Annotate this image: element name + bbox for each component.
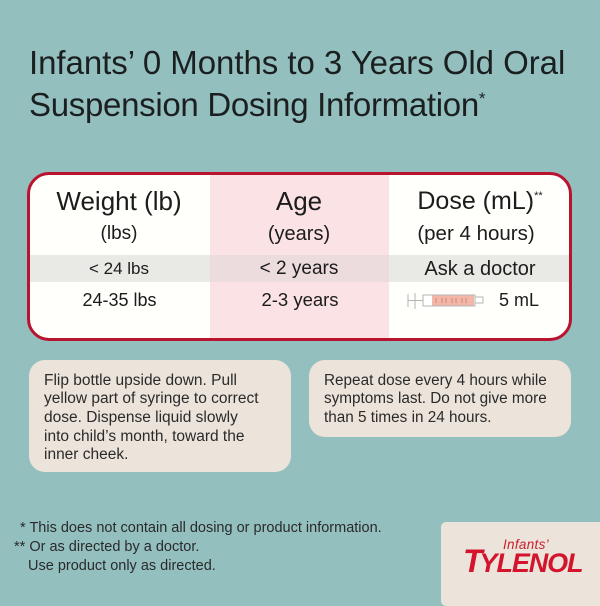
footnotes: ** Or as directed by a doctor. <box>14 539 199 555</box>
cell: ask a doctor: Ask a doctor <box>424 258 536 280</box>
text: how to dose <box>44 372 259 463</box>
text: how to dose: into child’s month, toward the <box>44 428 244 445</box>
header: age: Age <box>276 186 322 216</box>
panel: dosing table <box>27 172 572 341</box>
icon: syringe <box>408 293 484 309</box>
text: repeat dose: Repeat dose every 4 hours while <box>324 372 547 388</box>
header: dose: Dose (mL)** <box>417 187 543 215</box>
subheader: weight: (lbs) <box>101 223 137 244</box>
text: how to dose: Flip bottle upside down. Pull <box>44 372 237 388</box>
row: ask a doctor shading <box>30 255 569 282</box>
text: repeat dose: than 5 times in 24 hours. <box>324 409 492 426</box>
header: weight: Weight (lb) <box>56 186 182 216</box>
text: how to dose: yellow part of syringe to correct <box>44 390 259 407</box>
logo: tylenol: TYLENOL <box>463 543 582 579</box>
cell: under 24 lbs: < 24 lbs <box>89 259 149 278</box>
age column row shading <box>210 255 389 282</box>
text: repeat dose <box>324 372 547 426</box>
text: how to dose: inner cheek. <box>44 446 128 463</box>
text: repeat dose: symptoms last. Do not give more <box>324 390 547 407</box>
callout: repeat dose <box>309 360 571 437</box>
footnotes <box>14 520 382 574</box>
title: Infants’ 0 Months to 3 Years Old Oral <box>29 44 565 81</box>
cell: under 2 years: < 2 years <box>260 258 338 279</box>
logo: infants: Infants’ <box>503 537 549 552</box>
text: how to dose: dose. Dispense liquid slowly <box>44 409 238 426</box>
title: Suspension Dosing Information* <box>29 86 485 123</box>
age column shading <box>210 175 389 338</box>
subheader: dose: (per 4 hours) <box>417 222 535 245</box>
cell: 5 mL: 5 mL <box>499 290 539 310</box>
logo panel <box>441 522 600 606</box>
subheader: age: (years) <box>268 223 330 245</box>
footnotes: Use product only as directed. <box>28 558 216 574</box>
cell: 24-35 lbs: 24-35 lbs <box>82 290 157 310</box>
callout: how to dose <box>29 360 291 472</box>
cell: 2-3 years: 2-3 years <box>261 289 339 310</box>
title <box>29 44 565 123</box>
footnotes: * This does not contain all dosing or product information. <box>20 520 382 536</box>
